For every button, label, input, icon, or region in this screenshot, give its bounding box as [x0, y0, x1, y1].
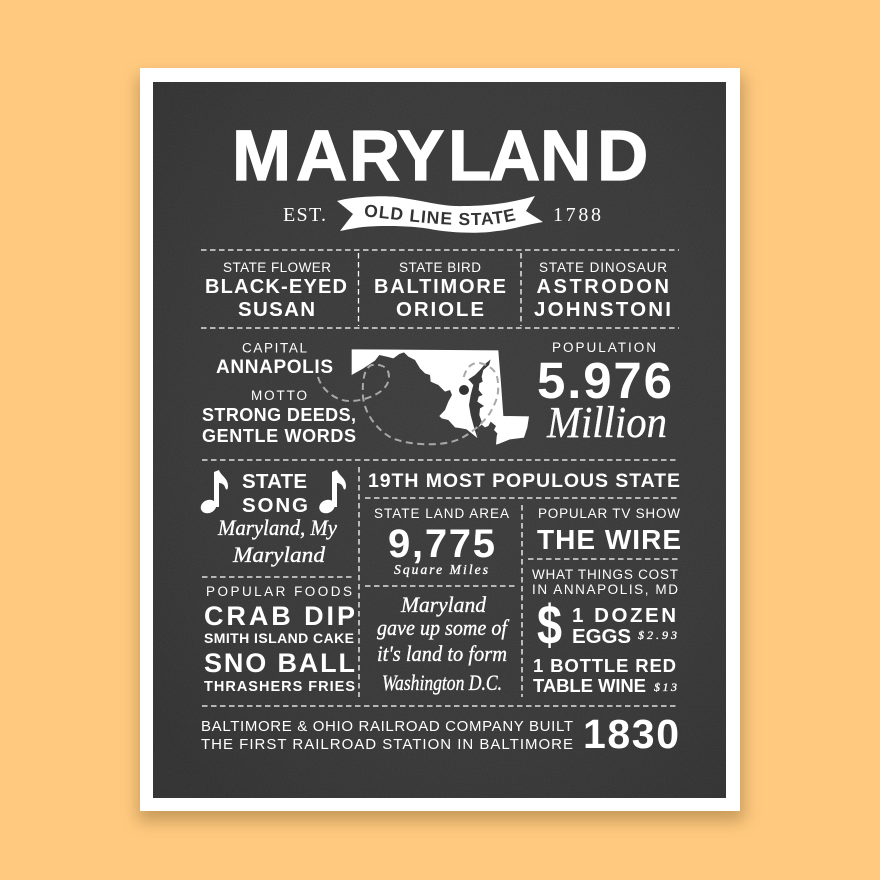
- icon: dollar sign: $: [537, 593, 562, 656]
- population: POPULATION: [552, 340, 656, 355]
- population: [537, 340, 672, 447]
- dividers: [201, 250, 679, 706]
- motto: [202, 388, 356, 446]
- state flower: BLACK-EYED: [205, 276, 347, 298]
- song title: Maryland, My: [217, 515, 337, 540]
- what things cost: 1 BOTTLE RED: [533, 655, 676, 676]
- motto: MOTTO: [251, 388, 307, 403]
- banner ribbon: [337, 196, 543, 233]
- popular foods: [204, 584, 355, 695]
- what things cost: TABLE WINE: [533, 675, 646, 696]
- subtitle: established and banner: [283, 196, 601, 233]
- what things cost: WHAT THINGS COST: [532, 567, 678, 582]
- capital marker: [459, 385, 469, 395]
- state land area: 9,775: [388, 522, 495, 566]
- population: 5.976: [537, 352, 672, 409]
- state silhouette: [352, 349, 529, 445]
- popular tv show: THE WIRE: [537, 524, 681, 555]
- state flower: SUSAN: [238, 298, 315, 321]
- map of Maryland: [318, 349, 529, 445]
- population: Million: [546, 398, 667, 447]
- state song: SONG: [242, 494, 308, 517]
- state bird: ORIOLE: [396, 298, 484, 321]
- founding year: 1788: [553, 204, 601, 226]
- state dinosaur: STATE DINOSAUR: [539, 260, 667, 275]
- state dinosaur: [534, 260, 671, 321]
- popular foods: SMITH ISLAND CAKE: [204, 630, 354, 646]
- state song: Maryland: [232, 542, 326, 567]
- frame shadow: [138, 76, 744, 821]
- fun fact script: [377, 592, 510, 695]
- what things cost: 1 DOZEN: [572, 604, 676, 627]
- railroad fact: 1830: [583, 711, 679, 757]
- state dinosaur: JOHNSTONI: [534, 298, 671, 321]
- popular foods: POPULAR FOODS: [206, 584, 352, 599]
- state land area: STATE LAND AREA: [374, 506, 509, 521]
- popular tv show: [537, 506, 681, 555]
- capital: CAPITAL: [242, 340, 307, 356]
- white frame: [140, 68, 740, 811]
- railroad fact: THE FIRST RAILROAD STATION IN BALTIMORE: [201, 736, 573, 753]
- heading: STATE: [242, 470, 307, 493]
- icon: music note left: [199, 470, 228, 516]
- state land area: [374, 506, 509, 577]
- what things cost: $13: [654, 680, 677, 694]
- motto: GENTLE WORDS: [202, 426, 356, 446]
- chalkboard panel: [153, 82, 726, 798]
- state bird: BALTIMORE: [374, 276, 506, 298]
- railroad fact: BALTIMORE & OHIO RAILROAD COMPANY BUILT: [201, 718, 573, 735]
- capital: [216, 340, 333, 378]
- railroad fact: [201, 711, 679, 757]
- capital: ANNAPOLIS: [216, 357, 333, 378]
- fun fact script: gave up some of: [377, 615, 510, 640]
- popular tv show: POPULAR TV SHOW: [538, 506, 680, 521]
- population rank: 19TH MOST POPULOUS STATE: [368, 470, 680, 492]
- popular foods: THRASHERS FRIES: [204, 679, 355, 695]
- motto: STRONG DEEDS,: [202, 405, 356, 425]
- state bird: [374, 260, 506, 321]
- state bird: STATE BIRD: [399, 260, 481, 275]
- fun fact script: Maryland: [400, 592, 487, 617]
- est label: EST.: [283, 204, 326, 226]
- what things cost: $2.93: [638, 628, 677, 642]
- popular foods: SNO BALL: [204, 648, 355, 678]
- state flower: [205, 260, 347, 321]
- what things cost: [532, 567, 678, 696]
- what things cost: EGGS: [572, 625, 631, 648]
- state dinosaur: ASTRODON: [536, 276, 669, 298]
- fun fact script: it's land to form: [377, 641, 507, 666]
- state song: [199, 470, 346, 567]
- state flower: STATE FLOWER: [223, 260, 331, 275]
- banner text: OLD LINE STATE: [365, 204, 516, 226]
- title: MARYLAND: [232, 117, 648, 196]
- icon: music note right: [317, 470, 346, 516]
- popular foods: CRAB DIP: [204, 601, 355, 631]
- what things cost: IN ANNAPOLIS, MD: [532, 582, 678, 597]
- fun fact script: Washington D.C.: [382, 670, 502, 695]
- route dashed line: [318, 363, 498, 444]
- state land area: Square Miles: [394, 562, 488, 577]
